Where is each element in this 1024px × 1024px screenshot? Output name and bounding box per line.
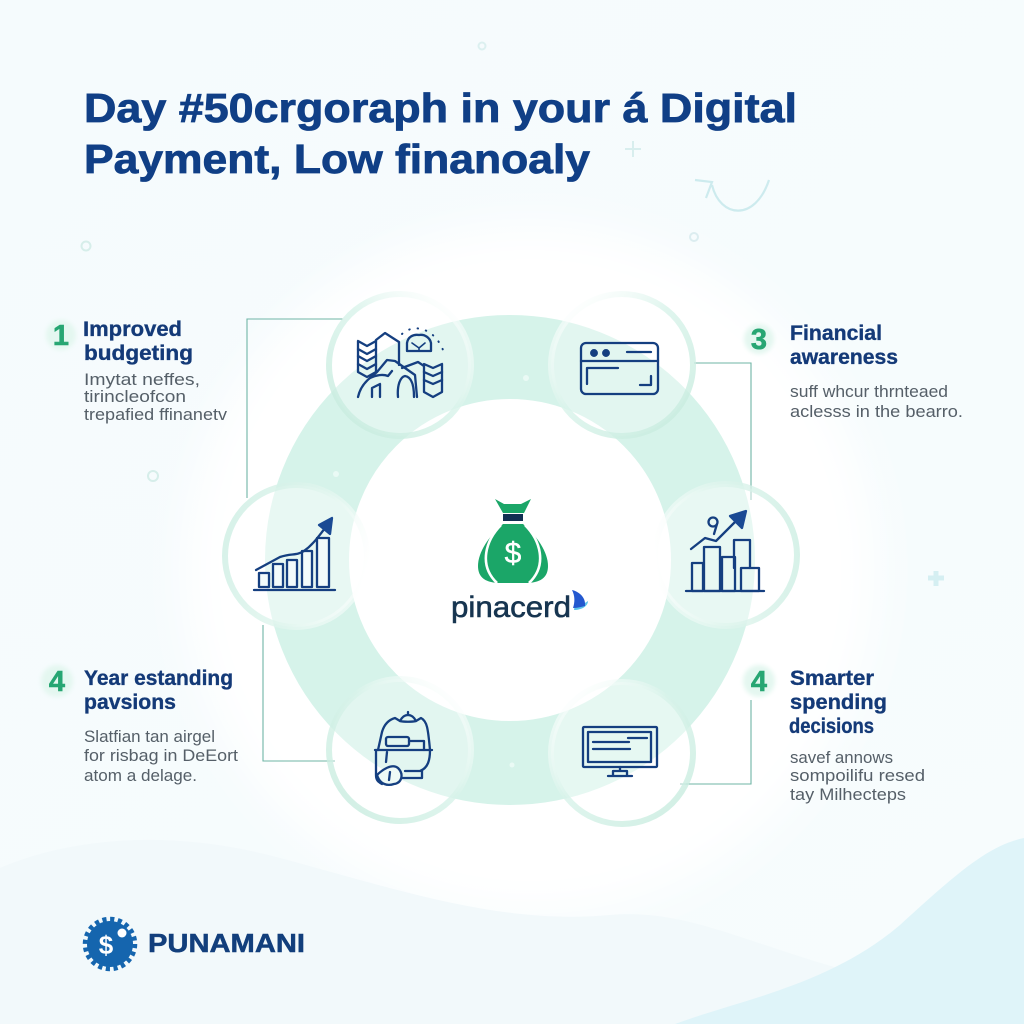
- item 4: smarter spending decisions: spending: [790, 691, 887, 714]
- item 4: smarter spending decisions: savef annows: [790, 749, 893, 767]
- item 1: improved budgeting: tirincleofcon: [84, 388, 186, 406]
- icon: gear with dollar: [85, 919, 135, 969]
- bubble: top left: [329, 294, 471, 436]
- item 4: smarter spending decisions: 4: [751, 666, 767, 698]
- item 4: year estanding pavsions: 4: [49, 666, 65, 698]
- item 3: financial awareness: awareness: [790, 346, 898, 369]
- item 3: financial awareness: 3: [751, 324, 767, 356]
- connector lines: [247, 319, 751, 784]
- item 4: year estanding pavsions: [41, 665, 238, 785]
- icon: browser window: [581, 343, 658, 394]
- item 4: smarter spending decisions: tay Milhecteps: [790, 786, 906, 804]
- icon: gear with dollar: $: [99, 930, 114, 960]
- title: [84, 85, 797, 182]
- icon: city and hills: [358, 328, 443, 397]
- item 3: financial awareness: aclesss in the bearro.: [790, 403, 963, 421]
- icon: backpack: [375, 712, 432, 785]
- description: Imytat neffes,: [84, 371, 200, 389]
- footer brand: [85, 919, 305, 969]
- item 4: smarter spending decisions: [743, 665, 925, 804]
- icon: bar chart with rising arrow: [254, 518, 335, 590]
- icon: buildings with arrow and pin: [686, 511, 764, 591]
- icon: logo sail: [572, 590, 588, 610]
- icon: money bag: $: [505, 537, 522, 570]
- item 4: year estanding pavsions: Slatfian tan airgel: [84, 728, 215, 746]
- bubble: bottom left: [329, 679, 471, 821]
- item 3: financial awareness: suff whcur thrnteaed: [790, 383, 948, 401]
- bubble: left: [225, 485, 367, 627]
- item 4: smarter spending decisions: decisions: [789, 715, 874, 738]
- heading: Improved: [83, 318, 182, 341]
- item 1: improved budgeting: 1: [53, 320, 69, 352]
- title: Payment, Low finanoaly: [84, 136, 590, 182]
- item 4: year estanding pavsions: Year estanding: [84, 667, 233, 690]
- badge: [46, 320, 76, 350]
- item 1: improved budgeting: trepafied ffinanetv: [84, 406, 228, 424]
- icon: desktop monitor: [583, 727, 657, 776]
- item 4: year estanding pavsions: atom a delage.: [84, 767, 197, 785]
- central ring: [307, 357, 713, 768]
- bubble: right: [655, 484, 797, 626]
- bubble: top right: [551, 294, 693, 436]
- item 1: improved budgeting: [46, 318, 228, 424]
- brand name: PUNAMANI: [148, 928, 305, 958]
- center logo: [451, 499, 588, 624]
- item 3: financial awareness: [744, 322, 963, 421]
- item 4: year estanding pavsions: for risbag in DeEort: [84, 747, 238, 765]
- item 1: improved budgeting: budgeting: [84, 342, 193, 365]
- title: Day #50crgoraph in your á Digital: [84, 85, 797, 131]
- item 3: financial awareness: Financial: [790, 322, 882, 345]
- item 4: smarter spending decisions: Smarter: [790, 667, 874, 690]
- item 4: year estanding pavsions: pavsions: [84, 691, 176, 714]
- item 4: smarter spending decisions: sompoilifu resed: [790, 767, 925, 785]
- bubble: bottom right: [551, 682, 693, 824]
- logo wordmark: pinacerd: [451, 591, 571, 624]
